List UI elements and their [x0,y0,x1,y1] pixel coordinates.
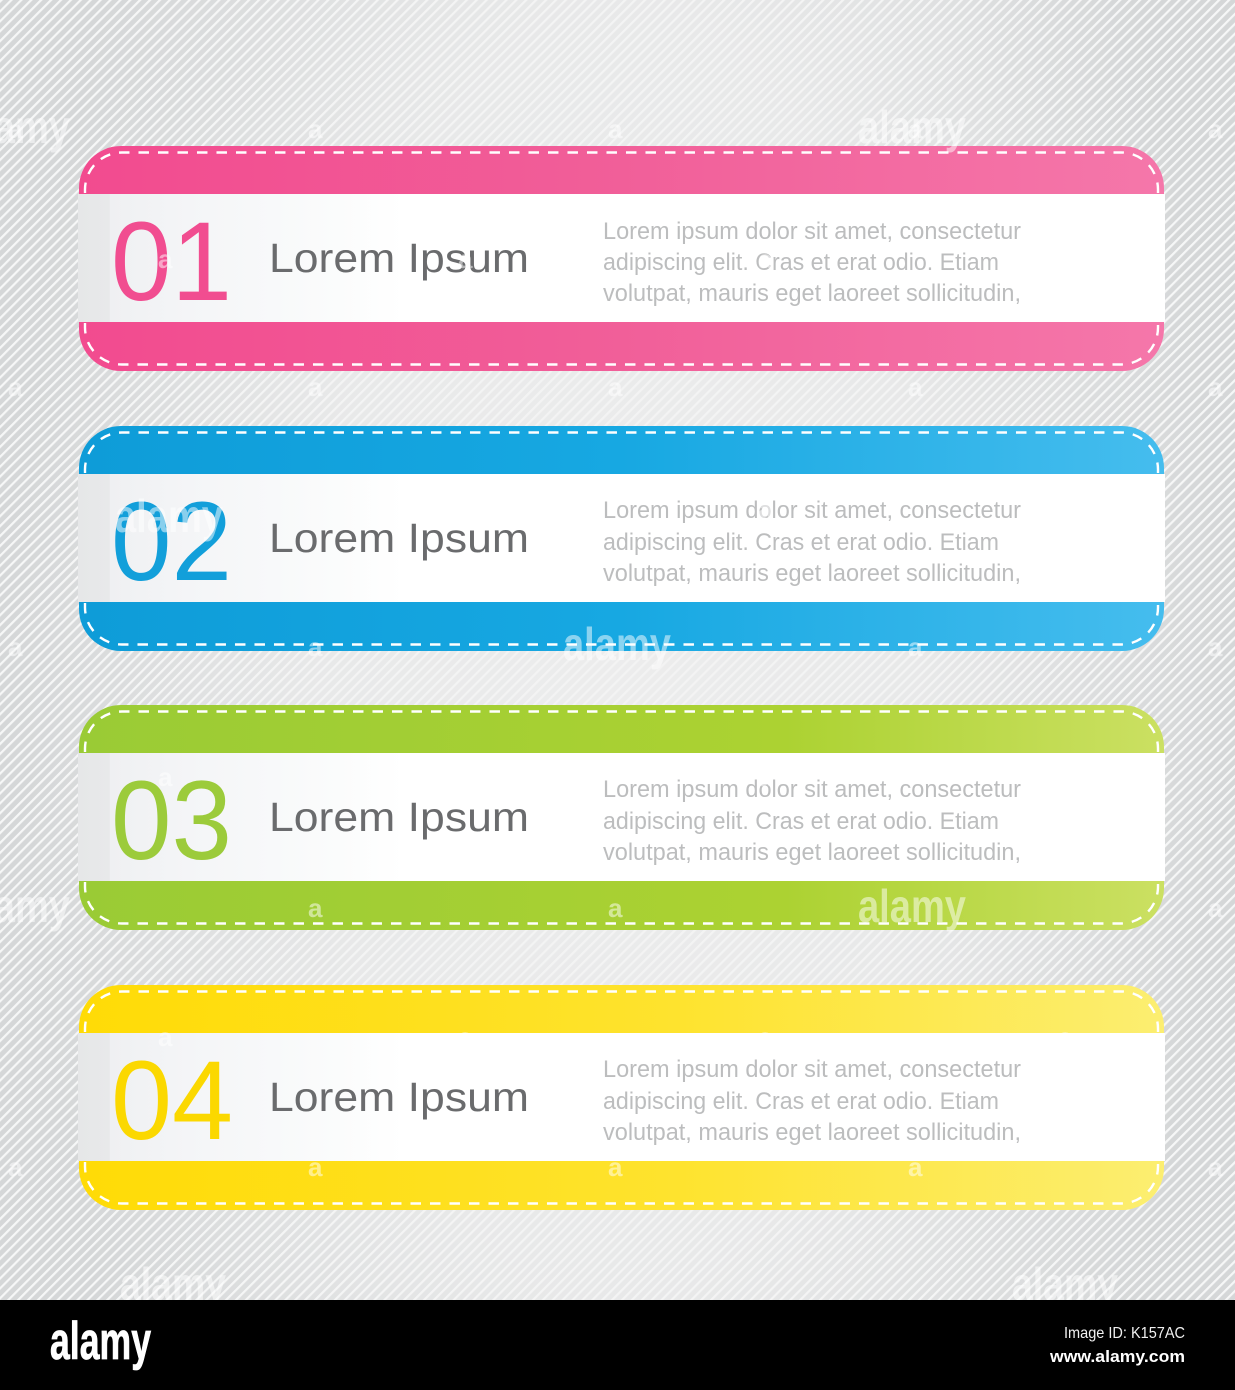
body text [603,218,1021,307]
band shape [79,705,1164,930]
small watermark letters [8,114,1223,1182]
white centre strip [78,753,1165,881]
small watermark letters: a [908,1152,923,1182]
number 03: 03 [111,758,232,883]
small watermark letters: a [158,1022,173,1052]
bottom stitching [85,1162,1158,1204]
heading: Lorem Ipsum [269,1074,529,1120]
small watermark letters: a [8,372,23,402]
band shape [79,146,1164,371]
small watermark letters: a [308,372,323,402]
small watermark letters: a [758,1022,773,1052]
small watermark letters: a [458,244,473,274]
body text: volutpat, mauris eget laoreet sollicitudin, [603,1119,1021,1146]
small watermark letters: a [308,893,323,923]
small watermark letters: a [1208,893,1223,923]
number 01: 01 [111,199,232,324]
body text: volutpat, mauris eget laoreet sollicitudin, [603,560,1021,587]
number 02: 02 [111,479,232,604]
small watermark letters: a [908,372,923,402]
bottom stitching [85,603,1158,645]
small watermark letters: a [908,114,923,144]
small watermark letters: a [158,762,173,792]
small watermark letters: a [1058,1022,1073,1052]
small watermark letters: a [608,1152,623,1182]
small watermark letters: a [1208,372,1223,402]
white centre strip [78,1033,1165,1161]
number 04: 04 [111,1038,233,1163]
watermarks: alamy [563,618,671,670]
panel: banner 02 blue [78,426,1165,651]
top stitching [85,432,1158,473]
watermarks: alamy [858,101,966,153]
small watermark letters: a [308,632,323,662]
top stitching [85,992,1158,1032]
watermarks: alamy [858,880,966,932]
body text [603,497,1021,587]
small watermark letters: a [1058,244,1073,274]
body text: adipiscing elit. Cras et erat odio. Etiam [603,249,999,276]
small watermark letters: a [908,632,923,662]
panel: banner 04 yellow [78,985,1165,1210]
website: www.alamy.com [1049,1347,1185,1366]
small watermark letters: a [308,114,323,144]
top stitching [85,712,1158,752]
small watermark letters: a [608,372,623,402]
body text [603,1056,1021,1146]
body text: Lorem ipsum dolor sit amet, consectetur [603,218,1021,245]
small watermark letters: a [758,494,773,524]
heading: Lorem Ipsum [269,515,529,561]
body text: volutpat, mauris eget laoreet sollicitudin, [603,839,1021,866]
small watermark letters: a [758,244,773,274]
image id: Image ID: K157AC [1064,1325,1185,1342]
white centre strip [78,474,1165,602]
body text: adipiscing elit. Cras et erat odio. Etiam [603,529,999,556]
small watermark letters: a [1208,1152,1223,1182]
small watermark letters: a [8,632,23,662]
small watermark letters: a [458,494,473,524]
watermarks: alamy [1012,1258,1118,1310]
band shape [79,985,1164,1210]
small watermark letters: a [608,114,623,144]
panel: banner 03 green [78,705,1165,930]
small watermark letters: a [1208,114,1223,144]
body text: Lorem ipsum dolor sit amet, consectetur [603,776,1021,803]
watermarks: alamy [115,490,223,542]
small watermark letters: a [1058,494,1073,524]
body text: Lorem ipsum dolor sit amet, consectetur [603,1056,1021,1083]
small watermark letters: a [1058,762,1073,792]
small watermark letters: a [758,762,773,792]
heading: Lorem Ipsum [269,794,529,840]
body text: volutpat, mauris eget laoreet sollicitudin, [603,280,1021,307]
panel: banner 01 pink [78,146,1165,371]
heading: Lorem Ipsum [269,235,529,281]
top stitching [85,152,1158,193]
small watermark letters: a [8,1152,23,1182]
bottom stitching [85,323,1158,364]
small watermark letters: a [458,762,473,792]
body text [603,776,1021,866]
small watermark letters: a [608,893,623,923]
small watermark letters: a [8,114,23,144]
small watermark letters: a [1208,632,1223,662]
footer logo: alamy [50,1312,151,1371]
bottom stitching [85,882,1158,924]
footer bar [0,1300,1235,1390]
small watermark letters: a [458,1022,473,1052]
watermarks: alamy [120,1258,226,1310]
white centre strip [78,194,1165,322]
body text: adipiscing elit. Cras et erat odio. Etiam [603,1088,999,1115]
watermarks [0,101,1118,1310]
band shape [79,426,1164,651]
small watermark letters: a [158,244,173,274]
small watermark letters: a [308,1152,323,1182]
body text: adipiscing elit. Cras et erat odio. Etiam [603,808,999,835]
body text: Lorem ipsum dolor sit amet, consectetur [603,497,1021,524]
